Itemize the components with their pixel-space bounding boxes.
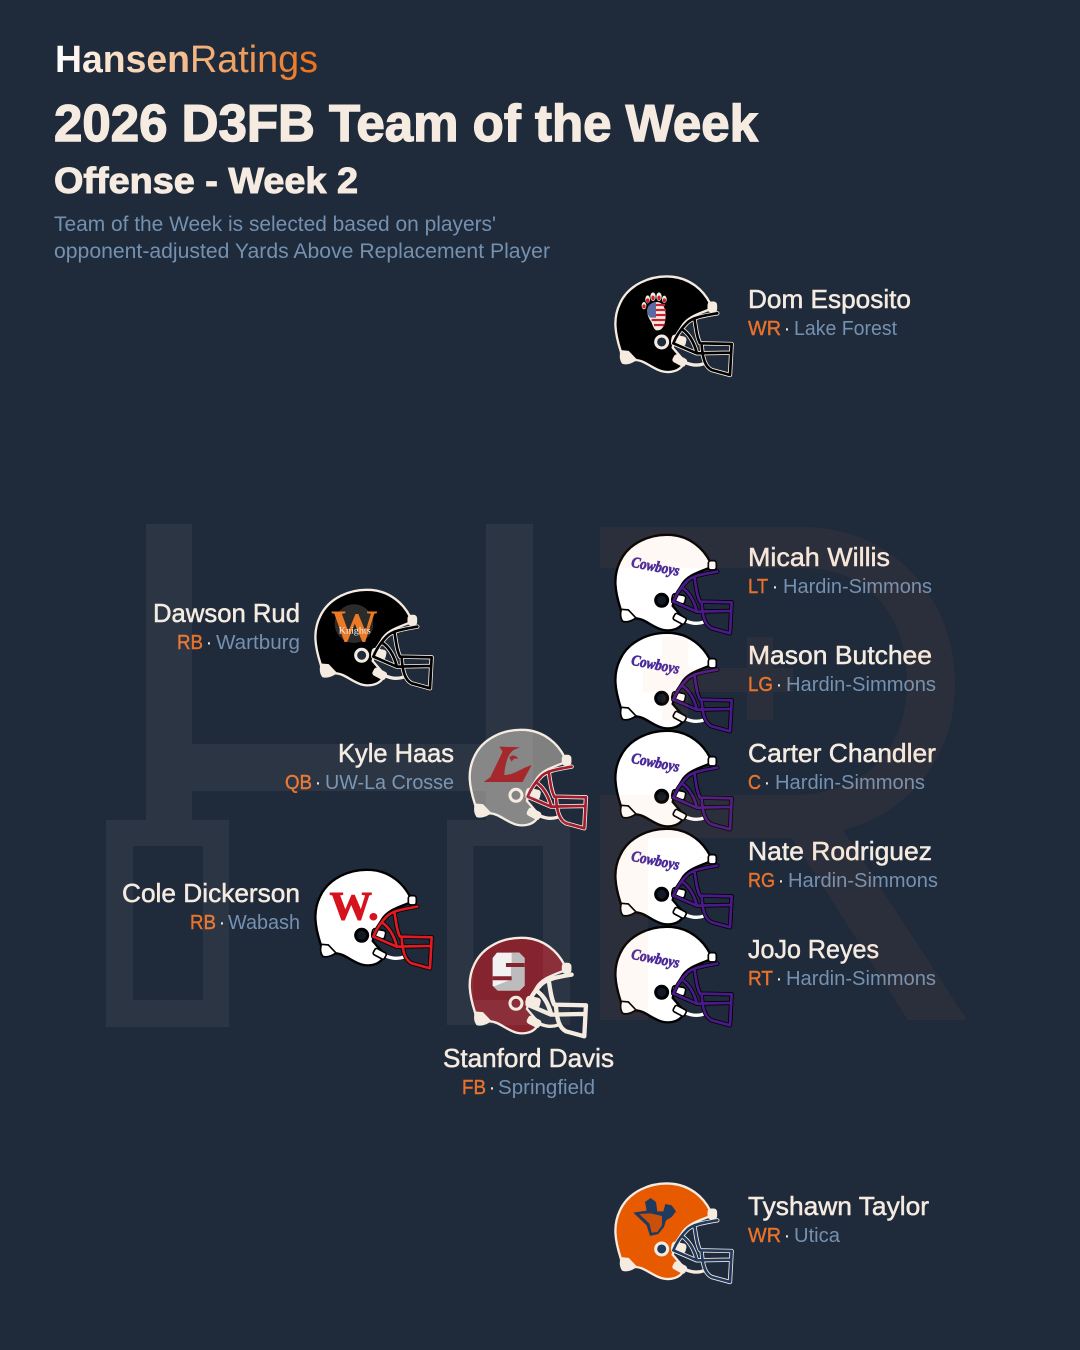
player: Mason Butchee: LG (748, 674, 773, 696)
icon: Wartburg helmet: W (331, 602, 378, 652)
player: Nate Rodriguez: Nate Rodriguez (748, 836, 932, 866)
player: Micah Willis: Hardin-Simmons (783, 576, 932, 598)
player: Dawson Rud: · (206, 632, 212, 654)
icon: Hardin-Simmons helmet: Cowboys (630, 946, 681, 972)
player: Nate Rodriguez: · (778, 870, 784, 892)
player: Cole Dickerson: Wabash (228, 912, 300, 934)
player: Carter Chandler (615, 731, 936, 829)
player: Carter Chandler: Hardin-Simmons (775, 772, 925, 794)
player: Tyshawn Taylor: · (784, 1225, 790, 1247)
player: Kyle Haas (285, 730, 586, 828)
player: JoJo Reyes (615, 927, 936, 1025)
player: Stanford Davis: Springfield (498, 1077, 595, 1099)
player: Carter Chandler: C (748, 772, 761, 794)
icon: Wabash helmet: W. (330, 883, 379, 928)
player: Dom Esposito: WR (748, 318, 781, 340)
player: Stanford Davis (443, 938, 614, 1099)
icon: UW-La Crosse helmet (470, 730, 586, 828)
icon: Wartburg helmet (315, 590, 432, 688)
icon: Hardin-Simmons helmet (615, 535, 732, 633)
player: Tyshawn Taylor: Tyshawn Taylor (748, 1191, 929, 1221)
description (54, 213, 550, 263)
player: Cole Dickerson: · (219, 912, 225, 934)
description: opponent-adjusted Yards Above Replacement Player (54, 240, 550, 263)
player: Stanford Davis: Stanford Davis (443, 1043, 614, 1073)
player: Nate Rodriguez: RG (748, 870, 775, 892)
player: Tyshawn Taylor (615, 1183, 929, 1282)
player: Dawson Rud (153, 590, 432, 688)
player: Mason Butchee: Mason Butchee (748, 640, 932, 670)
player: JoJo Reyes: Hardin-Simmons (786, 968, 936, 990)
player: JoJo Reyes: JoJo Reyes (748, 934, 879, 964)
player: Micah Willis: LT (748, 576, 768, 598)
player: Carter Chandler: Carter Chandler (748, 738, 936, 768)
watermark letter R (600, 527, 967, 1020)
player: Tyshawn Taylor: WR (748, 1225, 781, 1247)
player: Dawson Rud: Wartburg (216, 632, 300, 654)
brand wordmark: Hansen (55, 39, 190, 81)
player: Nate Rodriguez: Hardin-Simmons (788, 870, 938, 892)
icon: Utica helmet (615, 1183, 732, 1282)
icon: Hardin-Simmons helmet (615, 829, 732, 927)
player: Dom Esposito: Dom Esposito (748, 284, 911, 314)
icon: Hardin-Simmons helmet: Cowboys (630, 750, 681, 776)
icon: Hardin-Simmons helmet: Cowboys (630, 652, 681, 678)
watermark: HR monogram (106, 524, 967, 1027)
player: Dom Esposito: · (784, 318, 790, 340)
player: Mason Butchee (615, 633, 936, 731)
player: JoJo Reyes: · (776, 968, 782, 990)
player: Cole Dickerson (122, 870, 432, 968)
player: Micah Willis: · (772, 576, 778, 598)
icon: Wartburg helmet: Knights (339, 626, 371, 636)
player: Kyle Haas: UW-La Crosse (325, 772, 454, 794)
icon: Hardin-Simmons helmet: Cowboys (630, 554, 681, 580)
icon: Wabash helmet (315, 870, 432, 968)
icon: Hardin-Simmons helmet (615, 633, 732, 731)
player: Nate Rodriguez (615, 829, 938, 927)
icon: Springfield helmet (470, 938, 586, 1036)
player: Kyle Haas: QB (285, 772, 312, 794)
player: JoJo Reyes: RT (748, 968, 773, 990)
player: Stanford Davis: FB (462, 1077, 486, 1099)
player: Micah Willis: Micah Willis (748, 542, 890, 572)
player: Carter Chandler: · (764, 772, 770, 794)
title: 2026 D3FB Team of the Week (54, 95, 758, 153)
player: Mason Butchee: · (776, 674, 782, 696)
player: Cole Dickerson: RB (190, 912, 216, 934)
icon: Hardin-Simmons helmet: Cowboys (630, 848, 681, 874)
player: Kyle Haas: · (315, 772, 321, 794)
player: Dawson Rud: RB (177, 632, 203, 654)
description: Team of the Week is selected based on players' (54, 213, 496, 236)
icon: Hardin-Simmons helmet (615, 731, 732, 829)
player: Mason Butchee: Hardin-Simmons (786, 674, 936, 696)
player: Dawson Rud: Dawson Rud (153, 598, 300, 628)
player: Tyshawn Taylor: Utica (794, 1225, 841, 1247)
player: Kyle Haas: Kyle Haas (338, 738, 454, 768)
player: Stanford Davis: · (489, 1077, 495, 1099)
brand wordmark: Ratings (190, 39, 318, 81)
player: Dom Esposito: Lake Forest (794, 318, 897, 340)
icon: Hardin-Simmons helmet (615, 927, 732, 1025)
subtitle: Offense - Week 2 (54, 160, 358, 201)
watermark letter H (106, 524, 570, 1027)
player: Micah Willis (615, 535, 932, 633)
player: Dom Esposito (615, 276, 911, 375)
icon: Lake Forest helmet (615, 276, 732, 375)
player: Cole Dickerson: Cole Dickerson (122, 878, 300, 908)
